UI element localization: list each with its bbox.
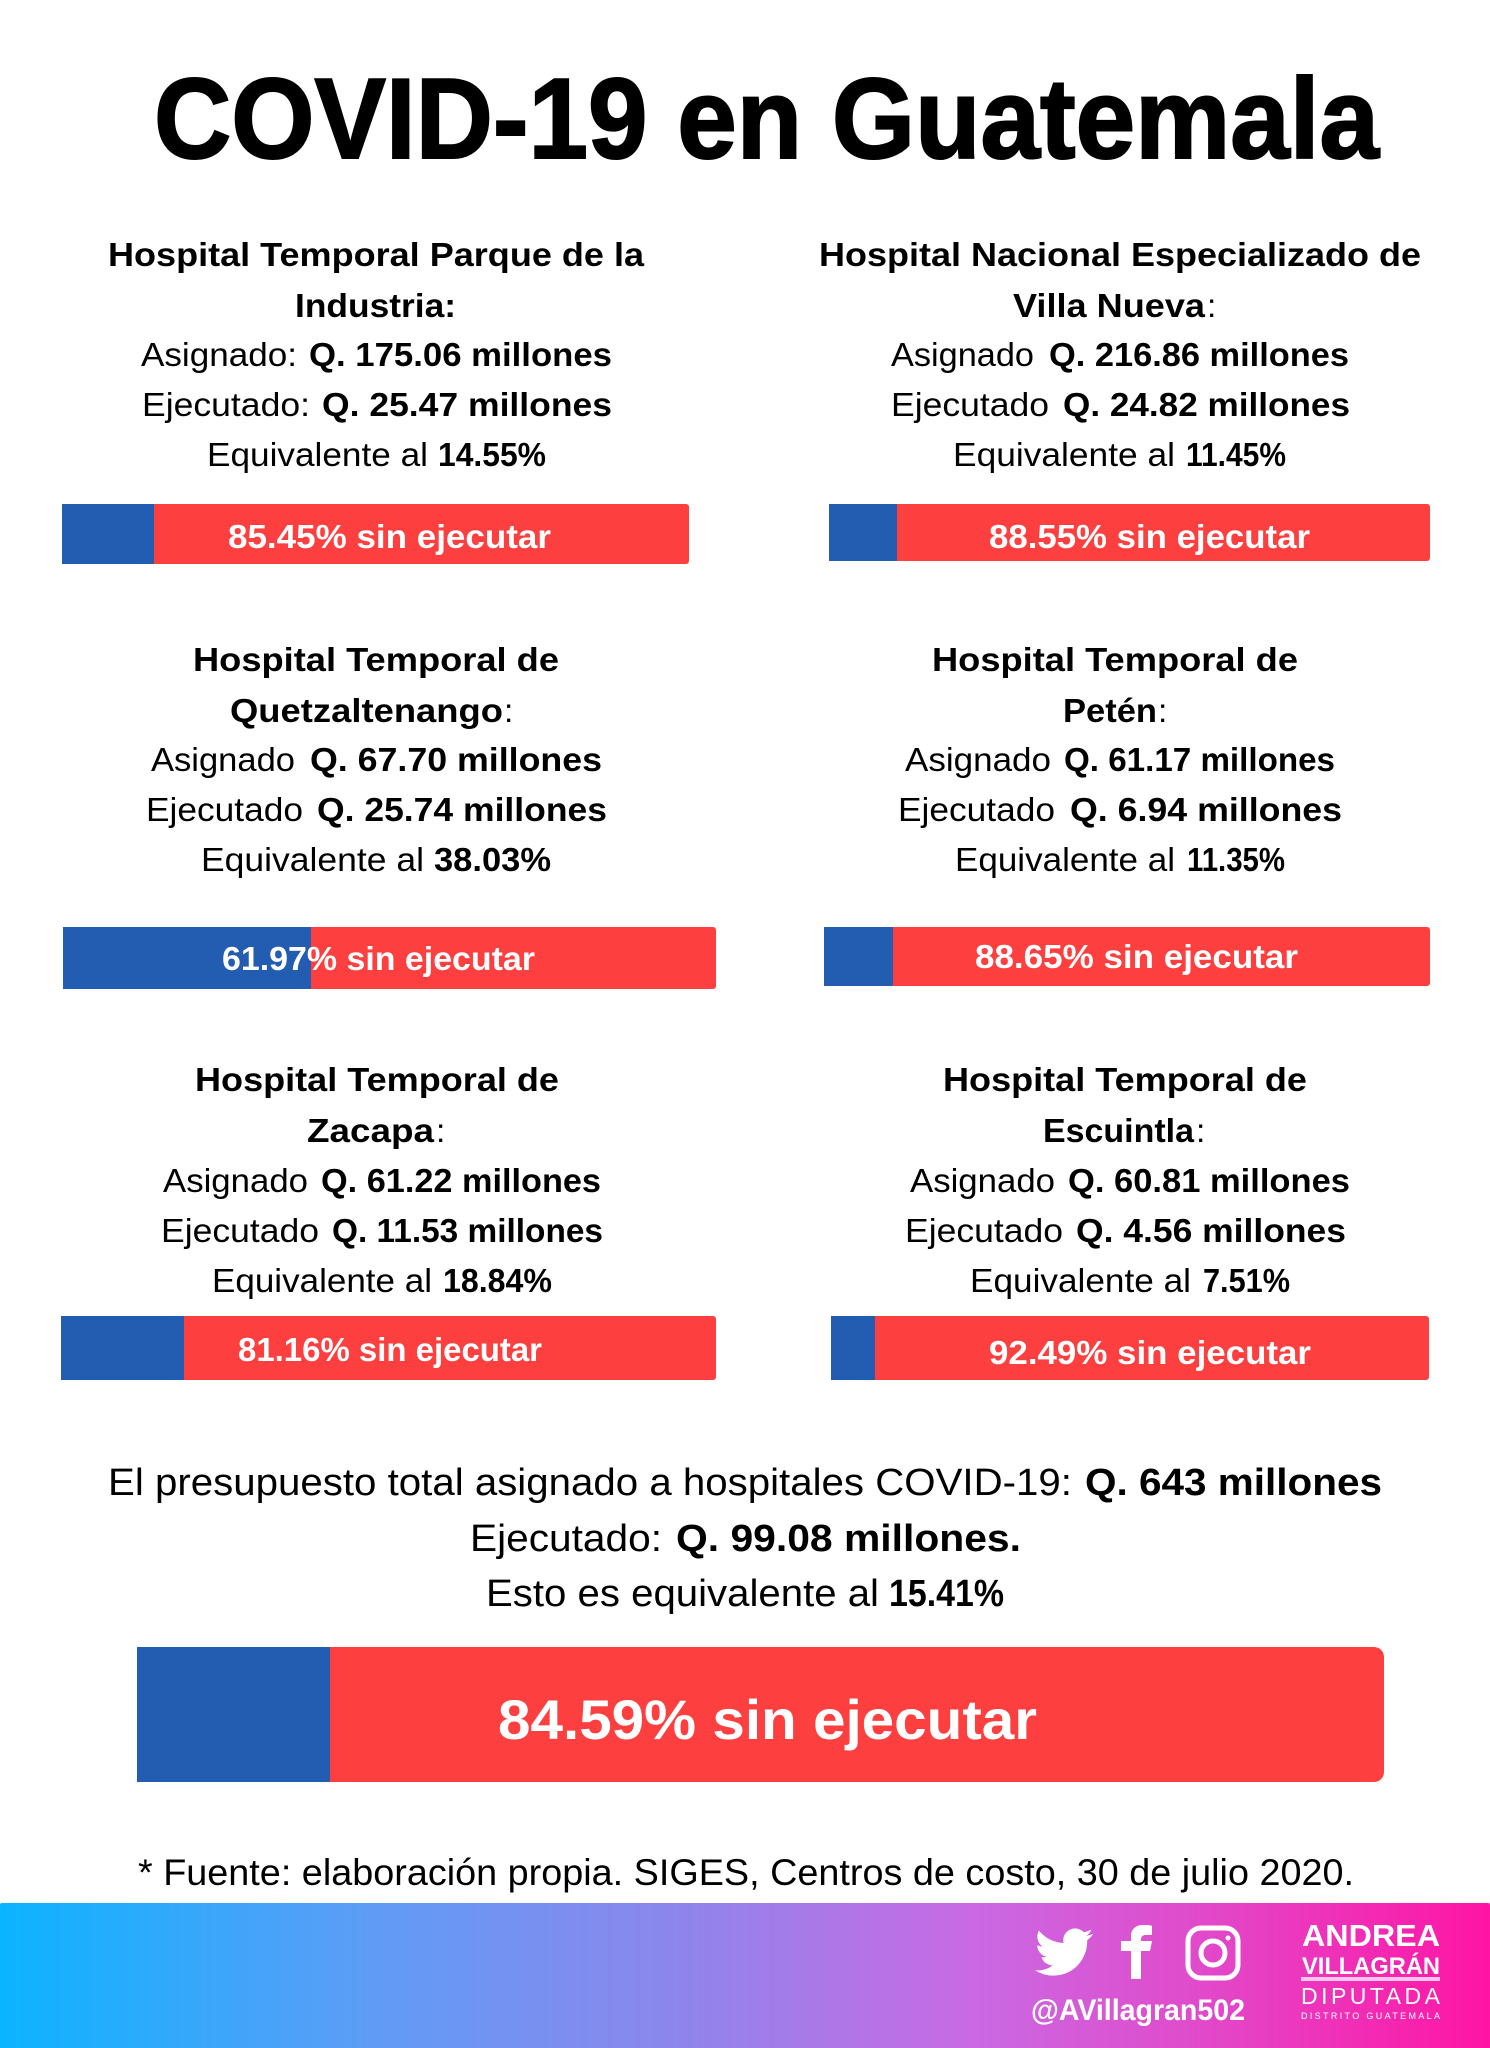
figures: Quetzaltenango xyxy=(146,742,607,879)
heading: Quetzaltenango xyxy=(193,642,559,730)
heading: Parque de la Industria xyxy=(108,237,644,325)
heading: Parque de la Industria: Hospital Temporal Parque de la xyxy=(108,237,644,274)
figures: Parque de la Industria: 14.55% xyxy=(438,437,546,474)
figures: Parque de la Industria: Equivalente al xyxy=(207,437,428,474)
icon: facebook xyxy=(1121,1925,1152,1979)
source note: * Fuente: elaboración propia. SIGES, Centros de costo, 30 de julio 2020. xyxy=(138,1852,1354,1893)
logo: Andrea Villagrán diputada: DIPUTADA xyxy=(1301,1983,1441,2009)
figures: Quetzaltenango: 38.03% xyxy=(434,842,551,879)
total progress bar: 84.59% sin ejecutar: 84.59% sin ejecutar xyxy=(498,1688,1037,1751)
progress bar: 88.65% sin ejecutar: 88.65% sin ejecutar xyxy=(975,939,1298,976)
social handle: @AVillagran502 xyxy=(1031,1994,1245,2027)
figures: Zacapa: Ejecutado xyxy=(161,1213,319,1250)
summary text: presupuesto total: El presupuesto total asignado a hospitales COVID-19: xyxy=(108,1462,1072,1504)
heading: Quetzaltenango: Quetzaltenango xyxy=(230,693,503,730)
figures: Parque de la Industria: Q. 25.47 millones xyxy=(322,387,612,424)
heading: Zacapa: : xyxy=(436,1113,445,1150)
heading: Villa Nueva xyxy=(819,237,1421,325)
progress bar: 88.65% sin ejecutar xyxy=(824,927,1430,986)
figures: Zacapa: Q. 11.53 millones xyxy=(332,1213,603,1250)
figures: Villa Nueva: 11.45% xyxy=(1186,437,1286,474)
heading: Escuintla: : xyxy=(1196,1113,1205,1150)
heading: Petén: : xyxy=(1158,693,1167,730)
figures: Villa Nueva: Equivalente al xyxy=(953,437,1175,474)
logo: Andrea Villagrán diputada: DISTRITO GUATEMALA xyxy=(1301,2011,1440,2021)
progress bar: 81.16% sin ejecutar xyxy=(61,1316,716,1380)
progress bar: 92.49% sin ejecutar: 92.49% sin ejecutar xyxy=(989,1335,1311,1372)
panel: Hospital Temporal Parque de la Industria xyxy=(62,237,689,564)
title: COVID-19 en Guatemala xyxy=(154,56,1380,183)
figures: Escuintla: Asignado xyxy=(910,1163,1055,1200)
figures: Villa Nueva xyxy=(891,337,1350,474)
figures: Petén: Asignado xyxy=(905,742,1051,779)
summary text: presupuesto total: Q. 643 millones xyxy=(1085,1462,1382,1504)
figures: Parque de la Industria: Q. 175.06 millones xyxy=(309,337,612,374)
figures: Petén: Q. 6.94 millones xyxy=(1070,792,1342,829)
figures: Quetzaltenango: Q. 67.70 millones xyxy=(310,742,602,779)
heading: Zacapa xyxy=(195,1062,559,1150)
heading: Parque de la Industria: Industria: xyxy=(295,288,456,325)
figures: Escuintla: Q. 60.81 millones xyxy=(1068,1163,1350,1200)
summary text: presupuesto total: Esto es equivalente al xyxy=(486,1573,879,1615)
figures: Villa Nueva: Q. 216.86 millones xyxy=(1049,337,1349,374)
heading: Quetzaltenango: : xyxy=(504,693,513,730)
total progress bar: 84.59% sin ejecutar xyxy=(137,1647,1384,1782)
logo: Andrea Villagrán diputada: ANDREA xyxy=(1302,1918,1440,1953)
heading: Petén: Petén xyxy=(1063,693,1157,730)
progress bar: 85.45% sin ejecutar xyxy=(62,504,689,564)
figures: Petén: Equivalente al xyxy=(955,842,1175,879)
figures: Zacapa: 18.84% xyxy=(443,1263,552,1300)
progress bar: 92.49% sin ejecutar xyxy=(831,1316,1429,1380)
heading: Villa Nueva: Hospital Nacional Especializado de xyxy=(819,237,1421,274)
panel: Hospital Nacional Especializado de Villa Nueva xyxy=(819,237,1430,561)
figures: Petén xyxy=(898,742,1342,879)
icon: instagram xyxy=(1188,1928,1238,1978)
heading: Villa Nueva: : xyxy=(1207,288,1216,325)
figures: Quetzaltenango: Asignado xyxy=(151,742,295,779)
panel: Hospital Temporal de Escuintla xyxy=(831,1062,1429,1380)
summary text: presupuesto total xyxy=(108,1462,1382,1615)
figures: Petén: Ejecutado xyxy=(898,792,1055,829)
progress bar: 61.97% sin ejecutar: 61.97% sin ejecutar xyxy=(222,941,535,978)
figures: Quetzaltenango: Equivalente al xyxy=(201,842,424,879)
figures: Escuintla: 7.51% xyxy=(1203,1263,1290,1300)
figures: Escuintla: Ejecutado xyxy=(905,1213,1063,1250)
heading: Petén: Hospital Temporal de xyxy=(932,642,1298,679)
figures: Parque de la Industria: Asignado: xyxy=(141,337,297,374)
heading: Villa Nueva: Villa Nueva xyxy=(1013,288,1205,325)
figures: Villa Nueva: Asignado xyxy=(891,337,1034,374)
figures: Parque de la Industria xyxy=(141,337,612,474)
heading: Escuintla: Escuintla xyxy=(1043,1113,1194,1150)
progress bar: 88.55% sin ejecutar xyxy=(829,504,1430,561)
heading: Escuintla xyxy=(943,1062,1307,1150)
logo: Andrea Villagrán diputada xyxy=(1301,1918,1441,2021)
figures: Parque de la Industria: Ejecutado: xyxy=(142,387,310,424)
heading: Zacapa: Zacapa xyxy=(307,1113,434,1150)
figures: Quetzaltenango: Ejecutado xyxy=(146,792,303,829)
figures: Zacapa xyxy=(161,1163,603,1300)
figures: Zacapa: Q. 61.22 millones xyxy=(321,1163,601,1200)
heading: Zacapa: Hospital Temporal de xyxy=(195,1062,559,1099)
figures: Villa Nueva: Q. 24.82 millones xyxy=(1063,387,1350,424)
progress bar: 85.45% sin ejecutar: 85.45% sin ejecutar xyxy=(228,519,551,556)
figures: Villa Nueva: Ejecutado xyxy=(891,387,1049,424)
heading: Quetzaltenango: Hospital Temporal de xyxy=(193,642,559,679)
progress bar: 81.16% sin ejecutar: 81.16% sin ejecutar xyxy=(238,1332,542,1369)
summary text: presupuesto total: Q. 99.08 millones. xyxy=(676,1518,1021,1560)
figures: Petén: 11.35% xyxy=(1187,842,1285,879)
panel: Hospital Temporal de Zacapa xyxy=(61,1062,716,1380)
logo: Andrea Villagrán diputada: VILLAGRÁN xyxy=(1302,1952,1440,1980)
heading: Petén xyxy=(932,642,1298,730)
summary text: presupuesto total: 15.41% xyxy=(889,1573,1004,1615)
heading: Escuintla: Hospital Temporal de xyxy=(943,1062,1307,1099)
footer band xyxy=(0,1903,1490,2048)
figures: Escuintla: Equivalente al xyxy=(970,1263,1191,1300)
figures: Petén: Q. 61.17 millones xyxy=(1064,742,1335,779)
figures: Zacapa: Equivalente al xyxy=(212,1263,432,1300)
progress bar: 88.55% sin ejecutar: 88.55% sin ejecutar xyxy=(989,519,1310,556)
figures: Zacapa: Asignado xyxy=(163,1163,308,1200)
panel: Hospital Temporal de Petén xyxy=(824,642,1430,986)
panel: Hospital Temporal de Quetzaltenango xyxy=(63,642,716,989)
figures: Escuintla: Q. 4.56 millones xyxy=(1076,1213,1346,1250)
figures: Escuintla xyxy=(905,1163,1350,1300)
icon: twitter xyxy=(1035,1928,1093,1976)
summary text: presupuesto total: Ejecutado: xyxy=(470,1518,662,1560)
progress bar: 61.97% sin ejecutar xyxy=(63,927,716,989)
figures: Quetzaltenango: Q. 25.74 millones xyxy=(317,792,607,829)
